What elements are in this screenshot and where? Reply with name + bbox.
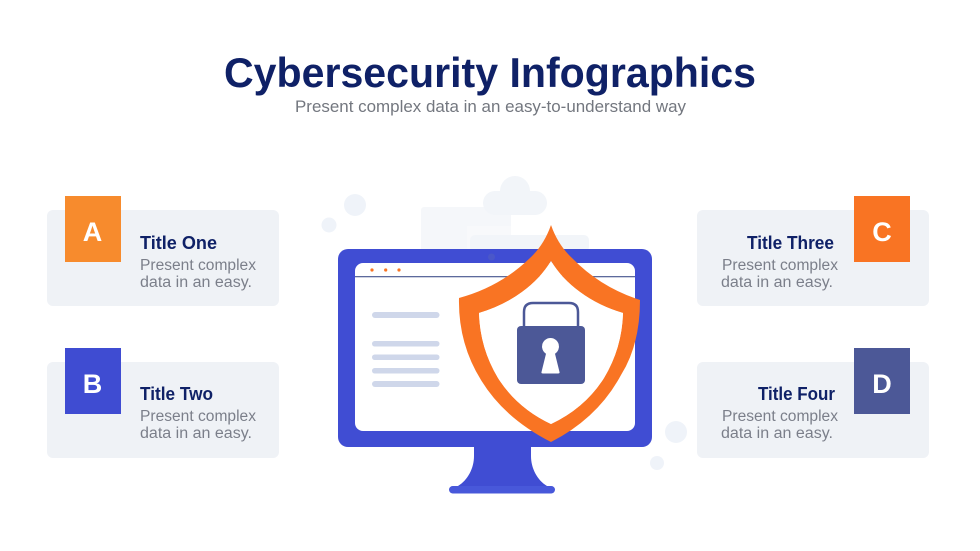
badge A: A <box>83 217 102 247</box>
text: title one body <box>140 257 256 291</box>
panel: title one <box>47 196 279 306</box>
monitor stand <box>458 446 547 486</box>
heading: title two: Title Two <box>140 384 213 404</box>
subtitle: Present complex data in an easy-to-understand way <box>295 97 686 116</box>
icon: shield with padlock <box>459 225 640 442</box>
padlock body <box>517 326 585 384</box>
window toolbar <box>355 268 635 277</box>
heading: title one: Title One <box>140 233 217 253</box>
keyhole <box>541 338 560 374</box>
shield outline <box>459 225 640 442</box>
monitor base <box>449 486 555 494</box>
panel: title two <box>47 348 279 458</box>
shield inner <box>479 261 623 424</box>
text: title two body: Present complex <box>140 408 256 425</box>
badge A <box>65 196 121 262</box>
badge B: B <box>83 369 102 399</box>
badge B <box>65 348 121 414</box>
screen <box>355 263 635 431</box>
text: title three body: data in an easy. <box>721 274 833 291</box>
text lines <box>372 312 440 387</box>
badge D: D <box>872 369 892 399</box>
panel: title four <box>697 348 929 458</box>
text: title two body <box>140 408 256 442</box>
text: title one body: data in an easy. <box>140 274 252 291</box>
panel: title three <box>697 196 929 306</box>
text: title four body: Present complex <box>722 408 838 425</box>
text: title four body <box>721 408 838 442</box>
badge C <box>854 196 910 262</box>
text: title one body: Present complex <box>140 257 256 274</box>
webcam <box>488 254 495 260</box>
badge D <box>854 348 910 414</box>
text: title three body <box>721 257 838 291</box>
monitor frame <box>338 249 652 447</box>
text: title two body: data in an easy. <box>140 425 252 442</box>
title: Cybersecurity Infographics <box>224 49 756 96</box>
text: title four body: data in an easy. <box>721 425 833 442</box>
text: title three body: Present complex <box>722 257 838 274</box>
badge C: C <box>872 217 892 247</box>
illustration: monitor <box>338 249 652 494</box>
illustration: background cloud and circles <box>322 176 687 470</box>
padlock shackle <box>524 303 578 326</box>
heading: title four: Title Four <box>758 384 835 404</box>
heading: title three: Title Three <box>747 233 834 253</box>
